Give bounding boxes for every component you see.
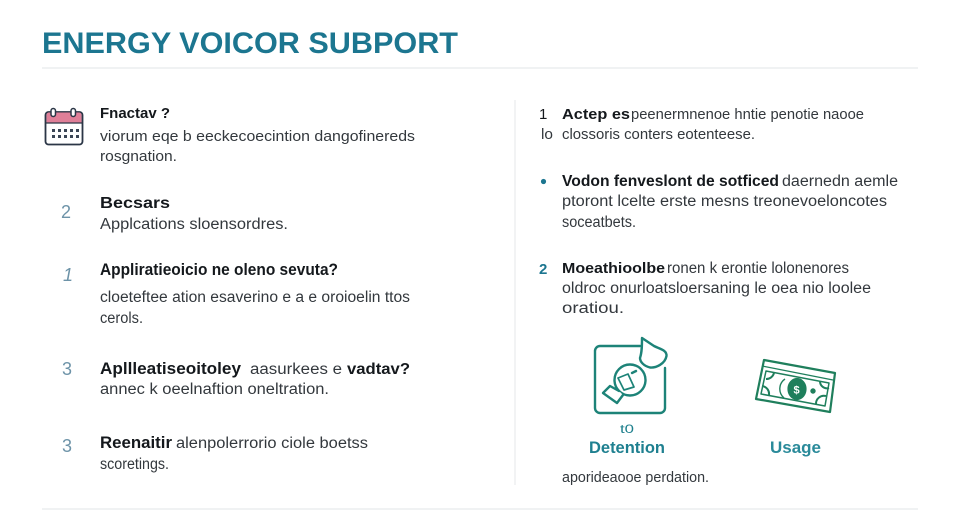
icon: detention xyxy=(595,338,667,413)
note 3: oldroc onurloatsloersaning le oea nio loolee xyxy=(562,280,871,297)
note 2: daernedn aemle xyxy=(782,173,898,190)
caption: aporideaooe perdation. xyxy=(562,470,709,486)
note 2: ptoront lcelte erste mesns treonevoeloncotes xyxy=(562,193,887,210)
question 3: cerols. xyxy=(100,310,143,327)
question 5: 3 xyxy=(62,436,72,456)
question 2 xyxy=(61,195,288,233)
note 1 xyxy=(539,106,864,143)
question 3: 1 xyxy=(63,265,73,285)
question 5 xyxy=(62,434,368,473)
note 2: Vodon fenveslont de sotficed xyxy=(562,173,779,190)
panel: left questions xyxy=(46,105,415,473)
question 3: Appliratieoicio ne oleno sevuta? xyxy=(100,261,338,279)
note 3: 2 xyxy=(539,261,547,278)
note 3: oratiou. xyxy=(562,300,624,317)
question 1: viorum eqe b eeckecoecintion dangofinereds xyxy=(100,129,415,145)
question 3 xyxy=(63,261,410,327)
question 2: 2 xyxy=(61,202,71,222)
question 1 xyxy=(100,105,415,165)
note 1: lo xyxy=(541,127,553,143)
label: usage: Usage xyxy=(770,439,821,457)
question 4: 3 xyxy=(62,359,72,379)
question 3: cloeteftee ation esaverino e a e oroioelin ttos xyxy=(100,289,410,306)
icon: money bill xyxy=(756,360,835,412)
icon: money bill: $ xyxy=(794,384,800,396)
note 1: 1 xyxy=(539,106,547,123)
label: detention xyxy=(589,422,665,457)
question 5: alenpolerrorio ciole boetss xyxy=(176,435,368,452)
note 3: ronen k erontie lolonenores xyxy=(667,260,849,277)
question 1: rosgnation. xyxy=(100,149,177,165)
note 2 xyxy=(541,173,898,231)
note 1: peenermnenoe hntie penotie naooe xyxy=(631,107,864,123)
note 1: clossoris conters eotenteese. xyxy=(562,127,755,143)
icon: calendar xyxy=(46,108,82,144)
label: detention: t0 xyxy=(620,422,634,436)
note 1: Actep es xyxy=(562,106,630,123)
question 5: Reenaitir xyxy=(100,434,173,452)
question 4: vadtav? xyxy=(347,361,410,378)
panel: right notes xyxy=(539,106,898,486)
question 2: Becsars xyxy=(100,195,170,212)
title: ENERGY VOICOR SUBPORT xyxy=(42,27,458,60)
question 4: annec k oeelnaftion oneltration. xyxy=(100,381,329,398)
question 4 xyxy=(62,359,410,398)
note 2: soceatbets. xyxy=(562,214,636,231)
question 4: aasurkees e xyxy=(250,361,342,378)
question 5: scoretings. xyxy=(100,456,169,473)
note 3: Moeathioolbe xyxy=(562,260,665,277)
label: detention: Detention xyxy=(589,439,665,457)
question 4: Apllleatiseoitoley xyxy=(100,360,242,378)
question 1: Fnactav ? xyxy=(100,105,170,122)
question 2: Applcations sloensordres. xyxy=(100,216,288,233)
note 3 xyxy=(539,260,871,317)
